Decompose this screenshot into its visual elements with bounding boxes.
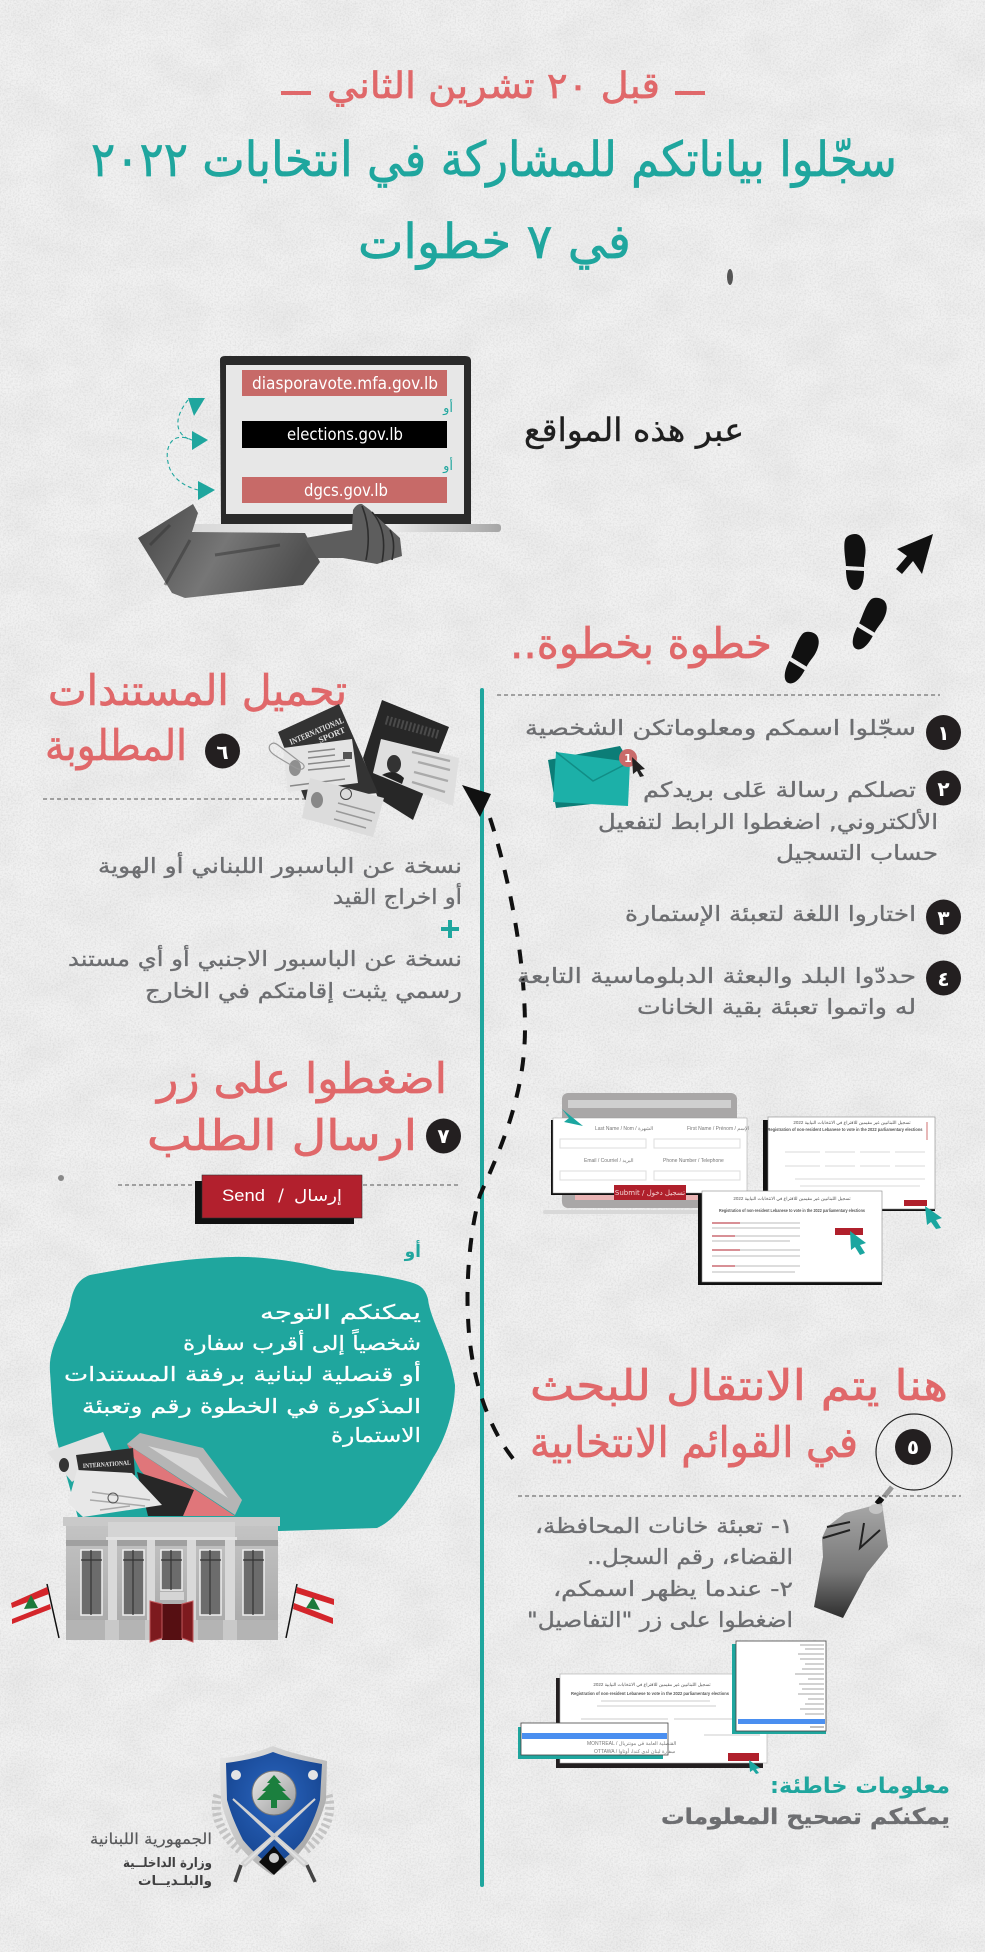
form: registration: [763, 1117, 935, 1211]
laptop with websites: diasporavote.mfa.gov.lb: [252, 374, 438, 394]
form: instructions: [698, 1191, 882, 1285]
laptop with websites: أو: [442, 457, 453, 474]
step 6 text: نسخة عن الباسبور الاجنبي أو أي مستند: [68, 945, 462, 971]
form: registration: تسجيل اللبنانيين غير مقيمين للاقتراع في الانتخابات النيابية 2022: [793, 1120, 911, 1126]
window: details form: [556, 1674, 767, 1768]
callout text: [64, 1300, 421, 1447]
step 1: ١: [937, 721, 950, 745]
step 2: الألكتروني, اضغطوا الرابط لتفعيل: [598, 809, 938, 834]
heading: press send: اضغطوا على زر: [155, 1054, 447, 1103]
step 3: [625, 900, 961, 934]
documents: passports and IDs: [269, 700, 459, 837]
left flag: [11, 1584, 59, 1638]
form: personal details: [551, 1118, 749, 1195]
heading: press send: ٧: [437, 1124, 450, 1148]
magnifier with step 5: ٥: [907, 1435, 919, 1459]
wrong information note: يمكنكم تصحيح المعلومات: [661, 1805, 950, 1830]
heading: press send: [118, 1054, 461, 1185]
step 6 text: نسخة عن الباسبور اللبناني أو الهوية: [98, 852, 462, 878]
voter list screenshots: [518, 1641, 826, 1774]
ministry name: وزارة الداخلــية: [123, 1856, 212, 1871]
submit button: [614, 1185, 686, 1200]
step 4: [517, 960, 961, 1019]
step 6 text: [68, 852, 462, 1004]
form: personal details: Last Name / Nom / الشهرة: [595, 1126, 653, 1132]
laptop with websites: [192, 356, 501, 532]
steps 1 to 4: [517, 715, 961, 1019]
heading: search in voter lists: [530, 1361, 948, 1468]
laptop with websites: elections.gov.lb: [287, 425, 403, 445]
right flag: [286, 1584, 334, 1638]
laptop with websites: أو: [442, 399, 453, 416]
step 4: ٤: [937, 967, 950, 991]
step 6 text: أو اخراج القيد: [333, 883, 462, 910]
documents inside building: INTERNATIONAL: [83, 1460, 132, 1470]
main title: سجّلوا بياناتكم للمشاركة في انتخابات ٢٠٢٢: [91, 132, 897, 188]
window: details form: تسجيل اللبنانيين غير مقيمين للاقتراع في الانتخابات النيابية 2022: [593, 1682, 711, 1688]
step 5 text: القضاء، رقم السجل..: [587, 1545, 793, 1570]
send button: /: [278, 1186, 284, 1206]
step 2: ٢: [937, 777, 950, 801]
callout text: أو قنصلية لبنانية برفقة المستندات: [64, 1361, 421, 1386]
main title: في ٧ خطوات: [358, 214, 631, 270]
callout text: يمكنكم التوجه: [260, 1300, 421, 1324]
submit button: Submit / تسجيل دخول: [615, 1189, 685, 1197]
send button: [195, 1175, 362, 1224]
wrong information note: [661, 1774, 950, 1830]
hand holding laptop: [138, 504, 402, 598]
documents: passports and IDs: INTERNATIONAL: [288, 715, 345, 747]
label: through these sites: عبر هذه المواقع: [524, 411, 744, 449]
step 2: حساب التسجيل: [776, 841, 938, 865]
footsteps and arrow: [778, 534, 933, 688]
magnifier with step 5: [518, 1414, 961, 1504]
ministry name: [90, 1830, 212, 1889]
window: dropdown right: [732, 1641, 826, 1734]
step 3: ٣: [937, 906, 950, 930]
vertical timeline line: [480, 688, 484, 1887]
callout text: الاستمارة: [331, 1423, 421, 1447]
step 4: حددّوا البلد والبعثة الدبلوماسية التابعة: [517, 964, 916, 988]
step 5 text: ٢- عندما يظهر اسمكم،: [553, 1577, 793, 1602]
step 5 text: اضغطوا على زر "التفاصيل": [527, 1608, 793, 1632]
form: personal details: Email / Courriel / البريد: [584, 1158, 634, 1164]
teal dashed arrows: [167, 398, 215, 500]
registration form screenshots: [543, 1093, 942, 1285]
crossed swords: [233, 1799, 315, 1866]
ministry logo shield: [216, 1746, 330, 1882]
step 5 text: [527, 1514, 793, 1632]
heading: upload documents: ٦: [216, 740, 229, 764]
heading: upload documents: تحميل المستندات: [48, 666, 347, 715]
building windows: [81, 1550, 264, 1615]
window: dropdown left: MONTREAL / القنصلية العامة في مونتريال: [587, 1741, 676, 1747]
form: personal details: First Name / Prénom / الإسم: [687, 1126, 749, 1132]
ministry name: الجمهورية اللبنانية: [90, 1830, 212, 1848]
window: dropdown left: OTTAWA / سفارة لبنان لدى كندا، أوتاوا: [594, 1747, 675, 1755]
red door: [150, 1592, 193, 1642]
building body: [63, 1517, 280, 1640]
icon: envelope with notification: 1: [624, 752, 632, 765]
form: instructions: تسجيل اللبنانيين غير مقيمين للاقتراع في الانتخابات النيابية 2022: [733, 1196, 851, 1202]
teal cursors: [562, 1109, 942, 1255]
heading: search in voter lists: في القوائم الانتخابية: [530, 1418, 858, 1468]
heading: search in voter lists: هنا يتم الانتقال للبحث: [530, 1361, 948, 1411]
step 5 text: ١- تعبئة خانات المحافظة،: [535, 1514, 793, 1538]
window: details form: Registration of non-resident Lebanese to vote in the 2022 parliamentary elections: [571, 1691, 729, 1696]
shield: [220, 1746, 327, 1875]
form: personal details: Phone Number / Telephone: [663, 1158, 724, 1164]
or label: أو: [404, 1240, 421, 1262]
lower diamond: [259, 1846, 287, 1875]
callout text: المذكورة في الخطوة رقم وتعبئة: [82, 1394, 421, 1419]
teal cursor: [749, 1760, 760, 1774]
heading: press send: ارسال الطلب: [147, 1111, 417, 1160]
laptop with websites: dgcs.gov.lb: [304, 481, 388, 501]
ministry name: والبلـديــات: [138, 1874, 212, 1889]
main title: [91, 132, 897, 270]
heading: step by step: خطوة بخطوة..: [510, 619, 772, 668]
step 1: سجّلوا اسمكم ومعلوماتكن الشخصية: [525, 716, 916, 741]
open roof pediment: [127, 1433, 242, 1516]
dashed path with arrowhead: [462, 785, 525, 1461]
send button: إرسال: [294, 1186, 342, 1206]
step 6 text: رسمي يثبت إقامتكم في الخارج: [145, 979, 462, 1004]
step 2: [598, 770, 961, 865]
window grids: [81, 1550, 264, 1615]
date line: قبل ٢٠ تشرين الثاني: [327, 66, 660, 107]
step 2: تصلكم رسالة عَلى بريدكم: [643, 778, 916, 803]
emblem: [252, 1771, 296, 1815]
send button: Send: [222, 1186, 265, 1205]
heading: upload documents: [43, 666, 347, 799]
form: instructions: Registration of non-resident Lebanese to vote in the 2022 parliamentary elections: [719, 1208, 865, 1213]
wrong information note: معلومات خاطئة:: [770, 1774, 950, 1799]
callout text: شخصياً إلى أقرب سفارة: [183, 1329, 421, 1356]
documents inside building: [47, 1432, 194, 1517]
step 4: له واتموا تعبئة بقية الخانات: [637, 995, 916, 1019]
step 3: اختاروا اللغة لتعبئة الإستمارة: [625, 902, 916, 926]
embassy building with documents and flags: [11, 1432, 334, 1642]
hand holding magnifier: [814, 1503, 888, 1618]
window: dropdown left: [518, 1723, 676, 1759]
step 1: [525, 715, 961, 750]
heading: upload documents: المطلوبة: [45, 721, 187, 770]
laurels: [216, 1795, 330, 1850]
icon: envelope with notification: [548, 746, 645, 808]
teal callout blob: [50, 1257, 455, 1531]
form: registration: Registration of non-resident Lebanese to vote in the 2022 parliamentary elections: [768, 1127, 923, 1132]
documents: passports and IDs: SPORT: [317, 725, 347, 745]
